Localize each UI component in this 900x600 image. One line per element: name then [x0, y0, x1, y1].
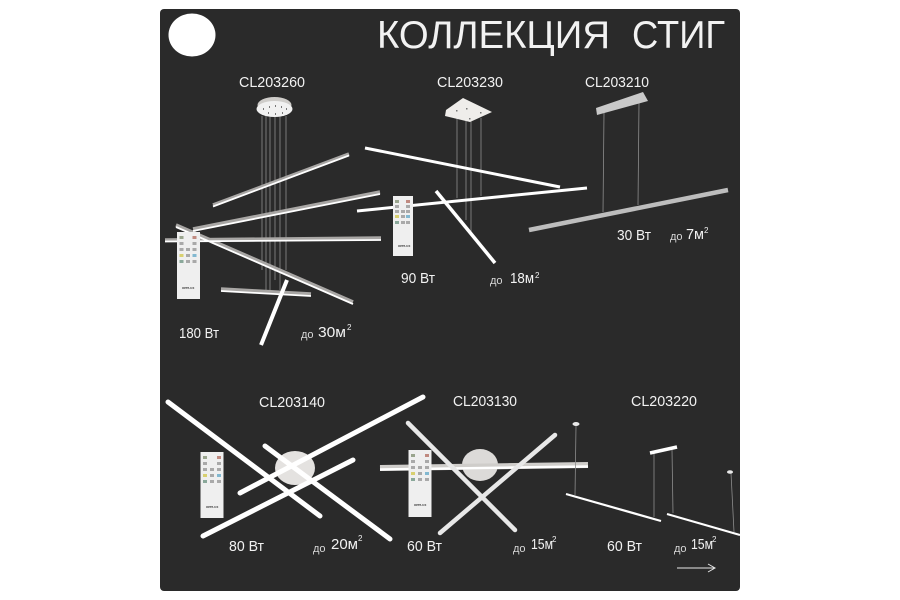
area up to 30 m2: 30м [318, 324, 346, 341]
power 180 W: 180 Вт [179, 325, 219, 342]
area up to 15 m2: до [674, 543, 687, 555]
remote control [408, 450, 432, 517]
remote control: OPPLUX [182, 286, 194, 290]
area up to 20 m2 [313, 534, 363, 555]
title: СТИГ [632, 14, 725, 57]
area up to 7 m2 [670, 226, 709, 243]
model label CL203230: CL203230 [437, 75, 503, 91]
lamp CL203210 [529, 92, 728, 230]
area up to 15 m2 [674, 535, 717, 555]
model label CL203130: CL203130 [453, 394, 517, 410]
product: CL203130 [380, 394, 588, 555]
area up to 18 m2: 2 [535, 271, 540, 280]
area up to 15 m2: 2 [552, 535, 557, 544]
power 80 W: 80 Вт [229, 538, 264, 555]
remote control [393, 196, 413, 256]
arrow: next [677, 564, 715, 572]
lamp CL203130 [380, 423, 588, 533]
model label CL203220: CL203220 [631, 394, 697, 410]
area up to 30 m2: до [301, 329, 314, 341]
power 60 W: 60 Вт [407, 538, 442, 555]
power 90 W: 90 Вт [401, 270, 435, 287]
area up to 20 m2: 20м [331, 536, 358, 553]
remote control: OPPLUX [206, 505, 218, 509]
area up to 15 m2: 15м [691, 536, 713, 553]
model label CL203140: CL203140 [259, 395, 325, 411]
area up to 7 m2: 2 [704, 226, 709, 235]
remote control [200, 452, 224, 518]
area up to 7 m2: до [670, 231, 683, 243]
area up to 15 m2: 2 [712, 535, 717, 544]
model label CL203210: CL203210 [585, 75, 649, 91]
logo placeholder: white circle [168, 14, 216, 56]
area up to 30 m2 [301, 323, 352, 341]
area up to 7 m2: 7м [686, 226, 704, 243]
product: CL203140 [168, 395, 423, 555]
area up to 15 m2 [513, 535, 557, 555]
model label CL203260: CL203260 [239, 75, 305, 91]
lamp CL203260 [165, 97, 381, 345]
lamp CL203230 [357, 98, 587, 263]
area up to 15 m2: до [513, 543, 526, 555]
remote control [177, 232, 200, 299]
area up to 18 m2 [490, 270, 540, 287]
product: CL203230 [357, 75, 587, 287]
title [377, 14, 725, 57]
power 30 W: 30 Вт [617, 227, 651, 244]
product: CL203210 [529, 75, 728, 244]
power 60 W: 60 Вт [607, 538, 642, 555]
panel: dark background [160, 9, 740, 591]
lamp CL203140 [168, 397, 423, 539]
area up to 20 m2: 2 [358, 534, 363, 543]
product: CL203260 [165, 75, 381, 345]
area up to 18 m2: до [490, 275, 503, 287]
remote control: OPPLUX [414, 503, 426, 507]
lamp CL203220 [566, 422, 740, 535]
remote control: OPPLUX [398, 244, 410, 248]
area up to 15 m2: 15м [531, 536, 553, 553]
area up to 20 m2: до [313, 543, 326, 555]
product: CL203220 [566, 394, 740, 572]
title: КОЛЛЕКЦИЯ [377, 14, 610, 57]
area up to 30 m2: 2 [347, 323, 352, 332]
area up to 18 m2: 18м [510, 270, 534, 287]
